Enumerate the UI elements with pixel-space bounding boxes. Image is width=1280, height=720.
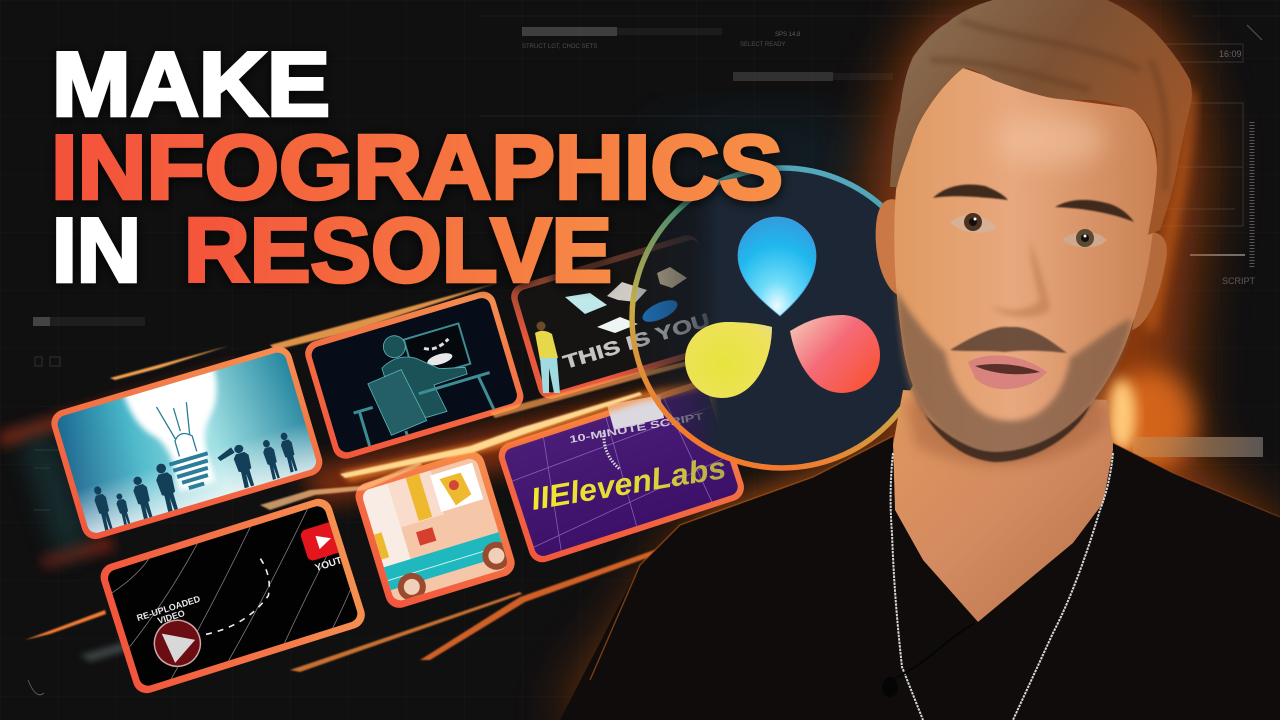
- eyebrows: [933, 184, 1134, 222]
- card: man at desk: [302, 288, 527, 465]
- card: truck illustration: [352, 448, 518, 611]
- teal truck body: [384, 532, 506, 590]
- card: this is you: [511, 235, 709, 399]
- title line: make: MAKE: [52, 34, 330, 136]
- title: [51, 34, 783, 302]
- red drop: [790, 315, 880, 393]
- title line: infographics: INFOGRAPHICS: [51, 118, 783, 218]
- diagonal lines: [112, 508, 350, 679]
- neck and chest: [893, 390, 1113, 622]
- script paper: [569, 395, 704, 446]
- title word: resolve: RESOLVE: [184, 200, 612, 302]
- blue drop: [738, 217, 816, 316]
- orange glow behind presenter: [560, 0, 1280, 720]
- title word: in: IN: [52, 200, 141, 302]
- cheek beard: [896, 290, 1132, 460]
- bulb filament and base: [156, 402, 208, 490]
- youtube badge: [300, 522, 340, 570]
- desk: [353, 371, 495, 446]
- hair shading: [930, 20, 1167, 190]
- re-uploaded caption: RE-UPLOADED: [135, 594, 202, 623]
- presenter: [560, 0, 1280, 720]
- caption: this is you: THIS IS YOU: [561, 310, 713, 374]
- silhouette at desk: [367, 335, 468, 436]
- t-shirt: [560, 436, 1280, 720]
- HUD interface details: SPS 14.8: [775, 32, 801, 38]
- eyes: [950, 213, 1107, 248]
- floating 3d objects: [565, 267, 687, 333]
- necklace: [891, 453, 1113, 720]
- caption: 10-minute script: 10-MINUTE SCRIPT: [569, 412, 704, 446]
- davinci resolve logo: [632, 168, 932, 468]
- forehead highlight: [995, 114, 1105, 166]
- hair: [890, 0, 1192, 235]
- card: lightbulb team: [48, 343, 326, 542]
- moustache and mouth: [950, 327, 1067, 389]
- HUD interface details: STRUCT LGT, CHOC SETS: [522, 44, 597, 50]
- toy shapes: [374, 472, 472, 560]
- card: elevenlabs: [495, 377, 748, 566]
- re-uploaded caption: VIDEO: [156, 608, 186, 626]
- HUD interface details: 274: [1130, 416, 1145, 426]
- youtube badge: YOUTUBE: [314, 549, 364, 574]
- grey hud bar: [1133, 437, 1263, 457]
- wheels: [397, 542, 512, 601]
- yellow drop: [685, 322, 772, 398]
- dashed route: [206, 558, 270, 636]
- lapel microphone: [882, 623, 975, 697]
- speed streaks: [0, 282, 765, 672]
- disc and ring: [632, 168, 932, 468]
- video play circle: [154, 620, 202, 668]
- HUD interface details: SELECT READY: [740, 42, 786, 48]
- glowing bulb: [120, 370, 220, 494]
- monitor: [402, 322, 472, 368]
- nose shadow: [990, 240, 1050, 317]
- HUD interface details: SCRIPT: [1222, 276, 1256, 286]
- card: re-uploaded video: [100, 498, 365, 694]
- neck shadow: [905, 400, 1108, 466]
- figure in yellow top: [535, 322, 560, 393]
- elevenlabs logo text: IIElevenLabs: [528, 450, 728, 517]
- ears: [876, 199, 1167, 330]
- chin beard: [925, 405, 1090, 462]
- face: [894, 68, 1157, 460]
- HUD interface details: 16:09: [1219, 49, 1242, 59]
- silhouettes: [94, 432, 298, 530]
- central glowing streak: [260, 358, 760, 510]
